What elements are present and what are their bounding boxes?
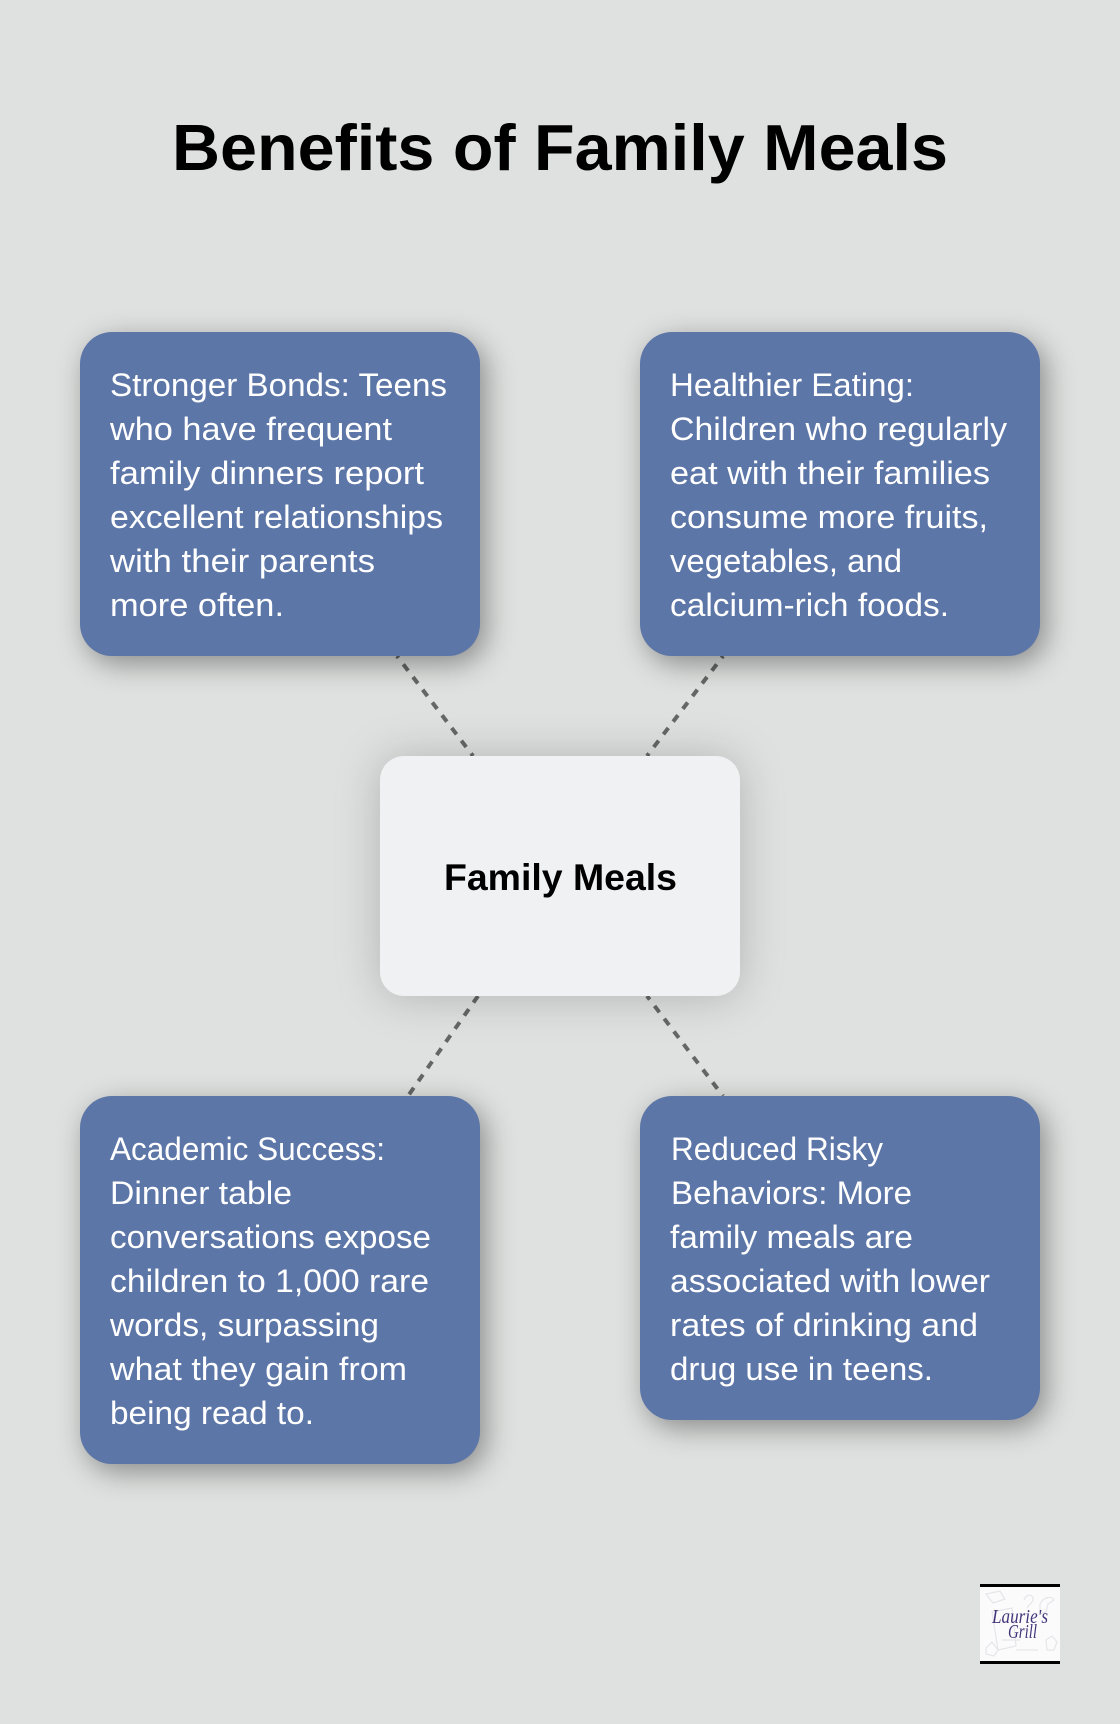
text: stronger bonds: excellent relationships [110,499,443,535]
text: reduced risky behaviors [670,1131,990,1387]
text: stronger bonds: who have frequent [109,411,392,447]
text: academic success: being read to. [110,1395,314,1431]
panel: healthier eating [640,332,1040,656]
text: reduced risky behaviors: rates of drinking and [670,1307,978,1343]
text: academic success: children to 1,000 rare [110,1263,429,1299]
connector: stronger bonds to family meals [397,656,473,756]
text: reduced risky behaviors: drug use in teens. [670,1351,933,1387]
text: academic success: what they gain from [109,1351,407,1387]
text: reduced risky behaviors: Reduced Risky [671,1131,883,1167]
text: stronger bonds [109,367,447,623]
text: stronger bonds: family dinners report [110,455,424,491]
connector: reduced risky behaviors to family meals [647,996,723,1096]
text: stronger bonds: with their parents [109,543,375,579]
label: family meals: Family Meals [444,857,677,898]
panel: academic success [80,1096,480,1464]
panel: family meals center [380,756,740,996]
title: Benefits of Family Meals [172,111,948,184]
text: stronger bonds: more often. [110,587,284,623]
text: healthier eating [670,367,1007,623]
text: academic success: Academic Success: [110,1131,385,1167]
logo: Laurie's Grill: Laurie's [991,1606,1048,1628]
text: healthier eating: Children who regularly [670,411,1007,447]
text: academic success: words, surpassing [109,1307,379,1343]
connector: healthier eating to family meals [647,656,723,756]
logo: Laurie's Grill [980,1584,1060,1664]
text: reduced risky behaviors: family meals are [670,1219,913,1255]
text: academic success: conversations expose [110,1219,431,1255]
text: reduced risky behaviors: Behaviors: More [671,1175,912,1211]
text: academic success: Dinner table [110,1175,292,1211]
text: stronger bonds: Stronger Bonds: Teens [110,367,447,403]
panel: stronger bonds [80,332,480,656]
text: healthier eating: vegetables, and [670,543,902,579]
connector: academic success to family meals [408,996,478,1096]
text: healthier eating: calcium-rich foods. [670,587,949,623]
text: healthier eating: eat with their families [670,455,990,491]
text: healthier eating: Healthier Eating: [670,367,914,403]
text: reduced risky behaviors: associated with lower [670,1263,990,1299]
logo: Laurie's Grill: Grill [1008,1621,1037,1643]
text: academic success [109,1131,431,1431]
text: healthier eating: consume more fruits, [670,499,988,535]
panel: reduced risky behaviors [640,1096,1040,1420]
